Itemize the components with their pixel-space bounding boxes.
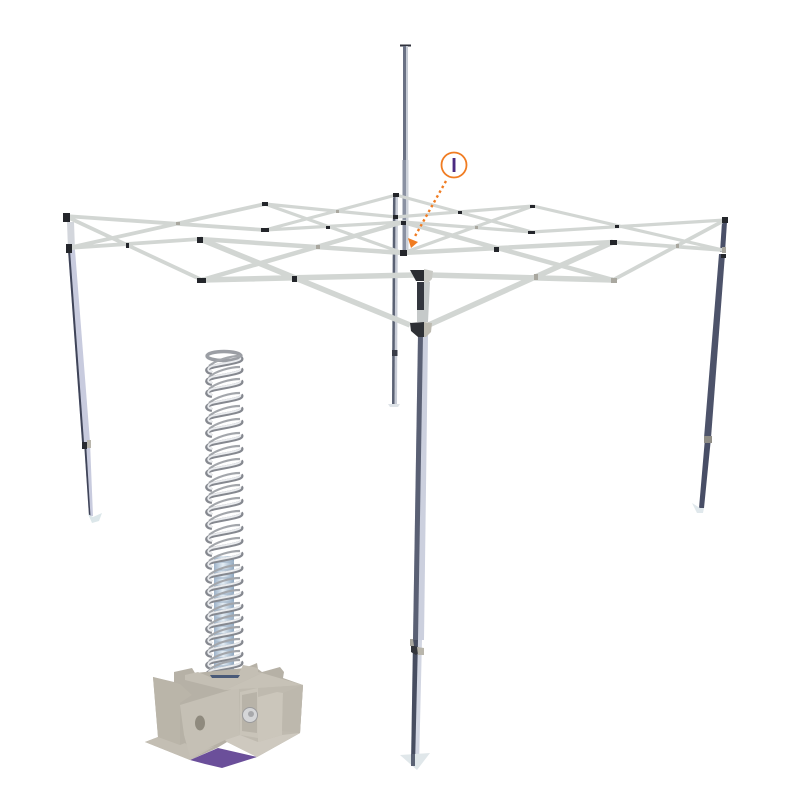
bolt head — [242, 708, 258, 722]
rear centre pole — [388, 195, 400, 407]
left leg — [67, 222, 102, 523]
right leg — [692, 222, 727, 513]
front leg — [400, 269, 433, 770]
callout: orange circle with purple label — [442, 152, 466, 178]
coil spring — [207, 352, 241, 677]
bolt hole — [195, 716, 205, 730]
truss joints — [63, 193, 728, 283]
arrow: dotted orange pointer — [408, 181, 446, 248]
threaded rod — [214, 556, 234, 674]
centre mast — [400, 44, 411, 252]
grey plastic base — [145, 663, 303, 760]
callout: orange circle with purple label: I — [451, 155, 457, 177]
purple foot — [190, 748, 257, 768]
spring assembly detail — [145, 352, 303, 768]
scissor truss bars — [65, 195, 725, 328]
